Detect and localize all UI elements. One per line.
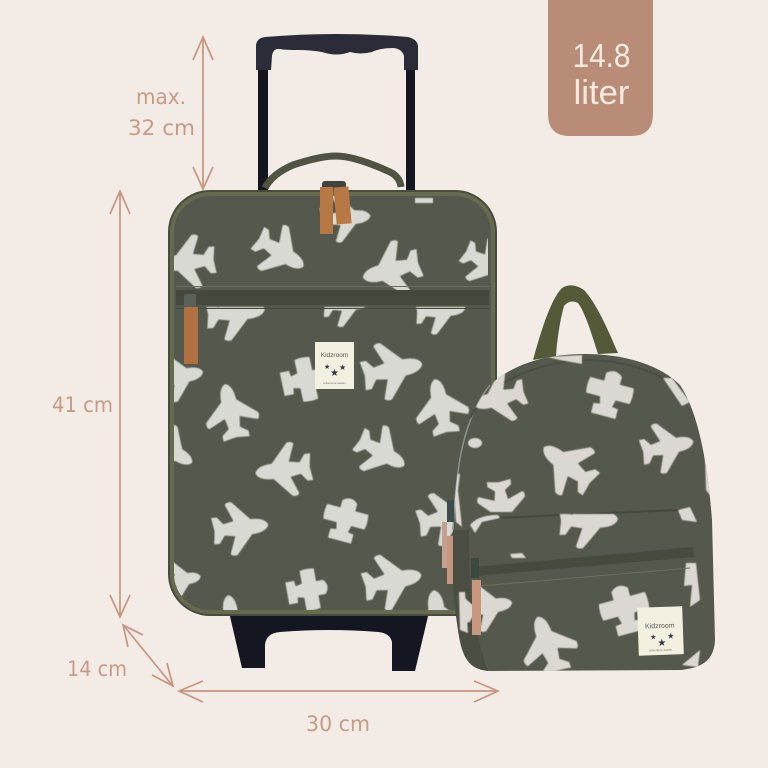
label: suitcase width: 30 cm [306, 712, 370, 736]
arrow: handle height [193, 37, 213, 189]
main zipper pulls [320, 181, 352, 234]
backpack strap [533, 285, 618, 360]
label: handle height: max. [136, 85, 186, 109]
label: handle height [128, 85, 195, 140]
suitcase brand tag: ★ [330, 368, 339, 379]
arrow: suitcase width [179, 681, 498, 702]
suitcase telescopic handle [256, 34, 418, 190]
suitcase brand tag: ★ [324, 363, 330, 371]
badge: volume: 14.8 [572, 37, 630, 74]
backpack plane pattern [453, 355, 712, 682]
backpack side panel and edge [452, 360, 682, 671]
suitcase brand tag: Kidzroom [321, 352, 348, 359]
suitcase brand tag: adventure awaits [323, 381, 346, 385]
arrow: suitcase depth [123, 625, 173, 686]
backpack side zipper pulls [442, 500, 454, 584]
suitcase carry handle [265, 156, 401, 188]
backpack brand tag: adventure awaits [649, 648, 673, 652]
backpack front zipper [471, 547, 694, 635]
backpack brand tag: Kidzroom [645, 622, 675, 631]
backpack brand tag [637, 606, 684, 656]
label: suitcase depth: 14 cm [67, 657, 127, 681]
backpack brand tag: ★ [667, 632, 675, 641]
backpack brand tag: ★ [657, 638, 667, 649]
badge: volume [548, 0, 653, 136]
suitcase plane pattern [174, 196, 488, 610]
label: handle height: 32 cm [128, 116, 195, 140]
backpack brand tag: ★ [650, 633, 657, 641]
label: suitcase height: 41 cm [52, 393, 113, 417]
suitcase wheels [229, 612, 429, 671]
suitcase brand tag [315, 342, 354, 389]
suitcase brand tag: ★ [339, 363, 346, 372]
suitcase body [168, 181, 497, 616]
arrow: suitcase height [110, 191, 130, 617]
backpack body [442, 354, 715, 682]
badge: volume: liter [574, 74, 630, 112]
front pocket zipper [176, 286, 489, 364]
